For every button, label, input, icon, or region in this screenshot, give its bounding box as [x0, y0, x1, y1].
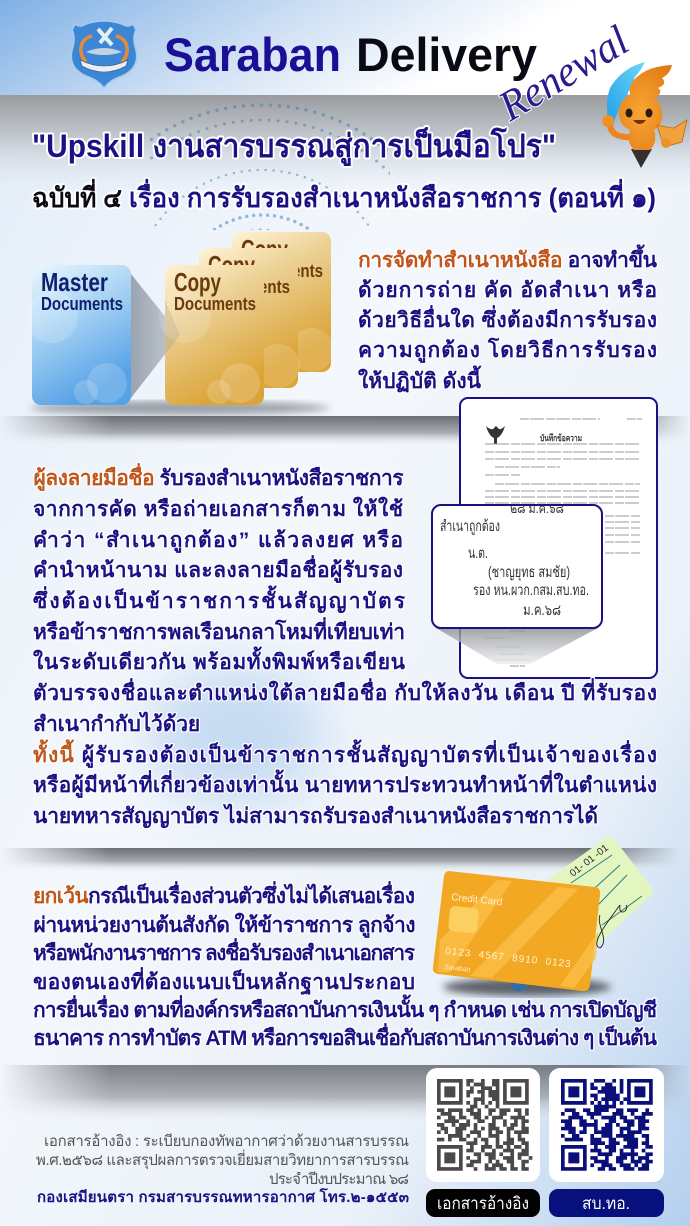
- arrow: copy projection: [131, 274, 180, 398]
- qr code: reference document: [426, 1068, 540, 1182]
- callout: certified copy wording: น.ต.: [468, 545, 488, 562]
- signature: [597, 905, 627, 948]
- text block: references: กองเสมียนตรา กรมสารบรรณทหารอากาศ โทร.๒-๑๕๕๓: [37, 1187, 409, 1206]
- text block: signatory rules: นายทหารสัญญาบัตร ไม่สามารถรับรองสำเนาหนังสือราชการได้: [33, 803, 598, 829]
- text block: signatory rules: คำว่า “สำเนาถูกต้อง” แล้วลงยศ หรือ: [33, 528, 403, 554]
- back copy document: Copy: [241, 234, 288, 264]
- green note: 01- 01 -01: [568, 842, 611, 879]
- heading: issue subtitle: ฉบับที่ ๔: [32, 178, 122, 213]
- text block: intro: ด้วยวิธีอื่นใด ซึ่งต้องมีการรับรอง: [358, 304, 657, 332]
- text block: signatory rules: หรือข้าราชการพลเรือนกลาโหมที่เทียบเท่า: [33, 616, 405, 644]
- text block: references: เอกสารอ้างอิง : ระเบียบกองทัพอากาศว่าด้วยงานสารบรรณ: [44, 1133, 409, 1150]
- text block: intro: ด้วยการถ่าย คัด อัดสำเนา หรือ: [358, 278, 657, 302]
- text block: signatory rules: ทั้งนี้ ผู้รับรองต้องเป็นข้าราชการชั้นสัญญาบัตรที่เป็นเจ้าของเรื่อง: [33, 739, 657, 769]
- illustration: memo document with certified copy stamp: [432, 398, 657, 678]
- credit card: Saraban: [444, 964, 471, 974]
- text block: references: [36, 1133, 409, 1206]
- credit card: Credit Card: [451, 892, 503, 908]
- label: reference document button: เอกสารอ้างอิง: [437, 1194, 529, 1213]
- illustration: credit card and note: [433, 836, 653, 996]
- text block: exception: ยกเว้นกรณีเป็นเรื่องส่วนตัวซึ่งไม่ได้เสนอเรื่อง: [33, 880, 415, 908]
- heading: issue subtitle: [32, 178, 656, 213]
- text block: intro: ความถูกต้อง โดยวิธีการรับรอง: [358, 337, 657, 364]
- text block: signatory rules: คำนำหน้านาม และลงลายมือชื่อผู้รับรอง: [33, 554, 403, 584]
- front copy document: [159, 265, 264, 405]
- text block: signatory rules: หรือผู้มีหน้าที่เกี่ยวข้องเท่านั้น นายทหารประทวนทำหน้าที่ในตำแหน่ง: [33, 769, 657, 799]
- arrow: zoom projection: [436, 628, 598, 664]
- memo page: [460, 398, 657, 678]
- body and flame head: [619, 65, 672, 150]
- heading: renewal script: Renewal: [490, 17, 637, 131]
- title: Delivery: [356, 28, 537, 81]
- face: [626, 108, 632, 118]
- middle copy document: Documents: [208, 277, 290, 297]
- text block: exception: [33, 880, 658, 1050]
- text block: exception: การยื่นเรื่อง ตามที่องค์กรหรือสถาบันการเงินนั้น ๆ กำหนด เช่น การเปิดบัญชี: [33, 994, 657, 1023]
- left arm: [610, 126, 632, 137]
- grey band: footer: [8, 1065, 684, 1116]
- illustration: master and copy documents: [26, 232, 334, 415]
- heading: upskill: "Upskill งานสารบรรณสู่การเป็นมือโปร": [32, 126, 556, 167]
- master document: Master: [41, 267, 108, 297]
- grey band: documents: [7, 416, 685, 442]
- callout: certified copy wording: ม.ค.๖๘: [523, 602, 561, 619]
- dotted arcs background: [150, 103, 390, 230]
- front copy document: Copy: [174, 267, 221, 297]
- label: reference document button: [426, 1189, 540, 1217]
- back copy document: Documents: [241, 261, 323, 281]
- text block: intro: ให้ปฏิบัติ ดังนี้: [358, 365, 482, 393]
- text block: references: ประจำปีงบประมาณ ๖๘: [269, 1171, 409, 1188]
- text block: signatory rules: [33, 462, 657, 829]
- text block: signatory rules: ตัวบรรจงชื่อและตำแหน่งใต้ลายมือชื่อ กับให้ลงวัน เดือน ปี ที่รับรอง: [33, 677, 657, 705]
- front copy document: Documents: [174, 294, 256, 314]
- text block: exception: ธนาคาร การทำบัตร ATM หรือการขอสินเชื่อกับสถาบันการเงินต่าง ๆ เป็นต้น: [33, 1022, 658, 1050]
- credit card: 0123 4567 8910 0123: [445, 946, 572, 970]
- callout: certified copy wording: [432, 505, 602, 628]
- text block: signatory rules: ในระดับเดียวกัน พร้อมทั้งพิมพ์หรือเขียน: [33, 646, 406, 674]
- back copy document: [232, 232, 334, 372]
- memo page: บันทึกข้อความ: [540, 433, 582, 443]
- icon: pen mascot holding book: [602, 62, 687, 168]
- date stamp: ๒๘ ม.ค.๖๘: [510, 501, 564, 516]
- pen nib: [631, 149, 652, 168]
- label: saraban department button: [549, 1189, 664, 1217]
- text block: references: พ.ศ.๒๕๖๘ และสรุปผลการตรวจเยี่ยมสายวิทยาการสารบรรณ: [36, 1149, 409, 1170]
- callout: certified copy wording: สำเนาถูกต้อง: [440, 518, 500, 535]
- text block: signatory rules: ผู้ลงลายมือชื่อ รับรองสำเนาหนังสือราชการ: [34, 462, 404, 492]
- master document: Documents: [41, 294, 123, 314]
- grey band: middle: [6, 848, 675, 869]
- text block: signatory rules: จากการคัด หรือถ่ายเอกสารก็ตาม ให้ใช้: [33, 495, 403, 521]
- text block: exception: ของตนเองที่ต้องแนบเป็นหลักฐานประกอบ: [33, 966, 415, 996]
- qr code: saraban department: [549, 1068, 664, 1182]
- text block: signatory rules: สำเนากำกับไว้ด้วย: [33, 711, 200, 736]
- text block: exception: หรือพนักงานราชการ ลงชื่อรับรองสำเนาเอกสาร: [33, 937, 416, 965]
- label: saraban department button: สบ.ทอ.: [582, 1194, 630, 1213]
- grey band: header: [0, 95, 690, 195]
- middle copy document: [199, 248, 300, 388]
- heading: issue subtitle: เรื่อง การรับรองสำเนาหนังสือราชการ (ตอนที่ ๑): [129, 178, 656, 213]
- green note: [547, 836, 653, 945]
- text block: signatory rules: ซึ่งต้องเป็นข้าราชการชั้นสัญญาบัตร: [33, 585, 406, 614]
- text block: intro: การจัดทำสำเนาหนังสือ อาจทำขึ้น: [358, 244, 658, 272]
- credit card: [433, 871, 600, 991]
- icon: air force saraban shield logo: [71, 21, 137, 88]
- text block: exception: ผ่านหน่วยงานต้นสังกัด ให้ข้าราชการ ลูกจ้าง: [34, 912, 416, 939]
- title: Saraban: [164, 28, 341, 81]
- master document: [26, 265, 131, 405]
- callout: certified copy wording: รอง หน.ผวก.กสม.สบ.ทอ.: [473, 582, 589, 599]
- feather: [607, 62, 645, 128]
- book: [657, 120, 687, 147]
- text block: intro: [358, 244, 658, 393]
- title: [164, 28, 537, 81]
- middle copy document: Copy: [208, 250, 255, 280]
- callout: certified copy wording: (ชาญยุทธ สมชัย): [488, 564, 570, 582]
